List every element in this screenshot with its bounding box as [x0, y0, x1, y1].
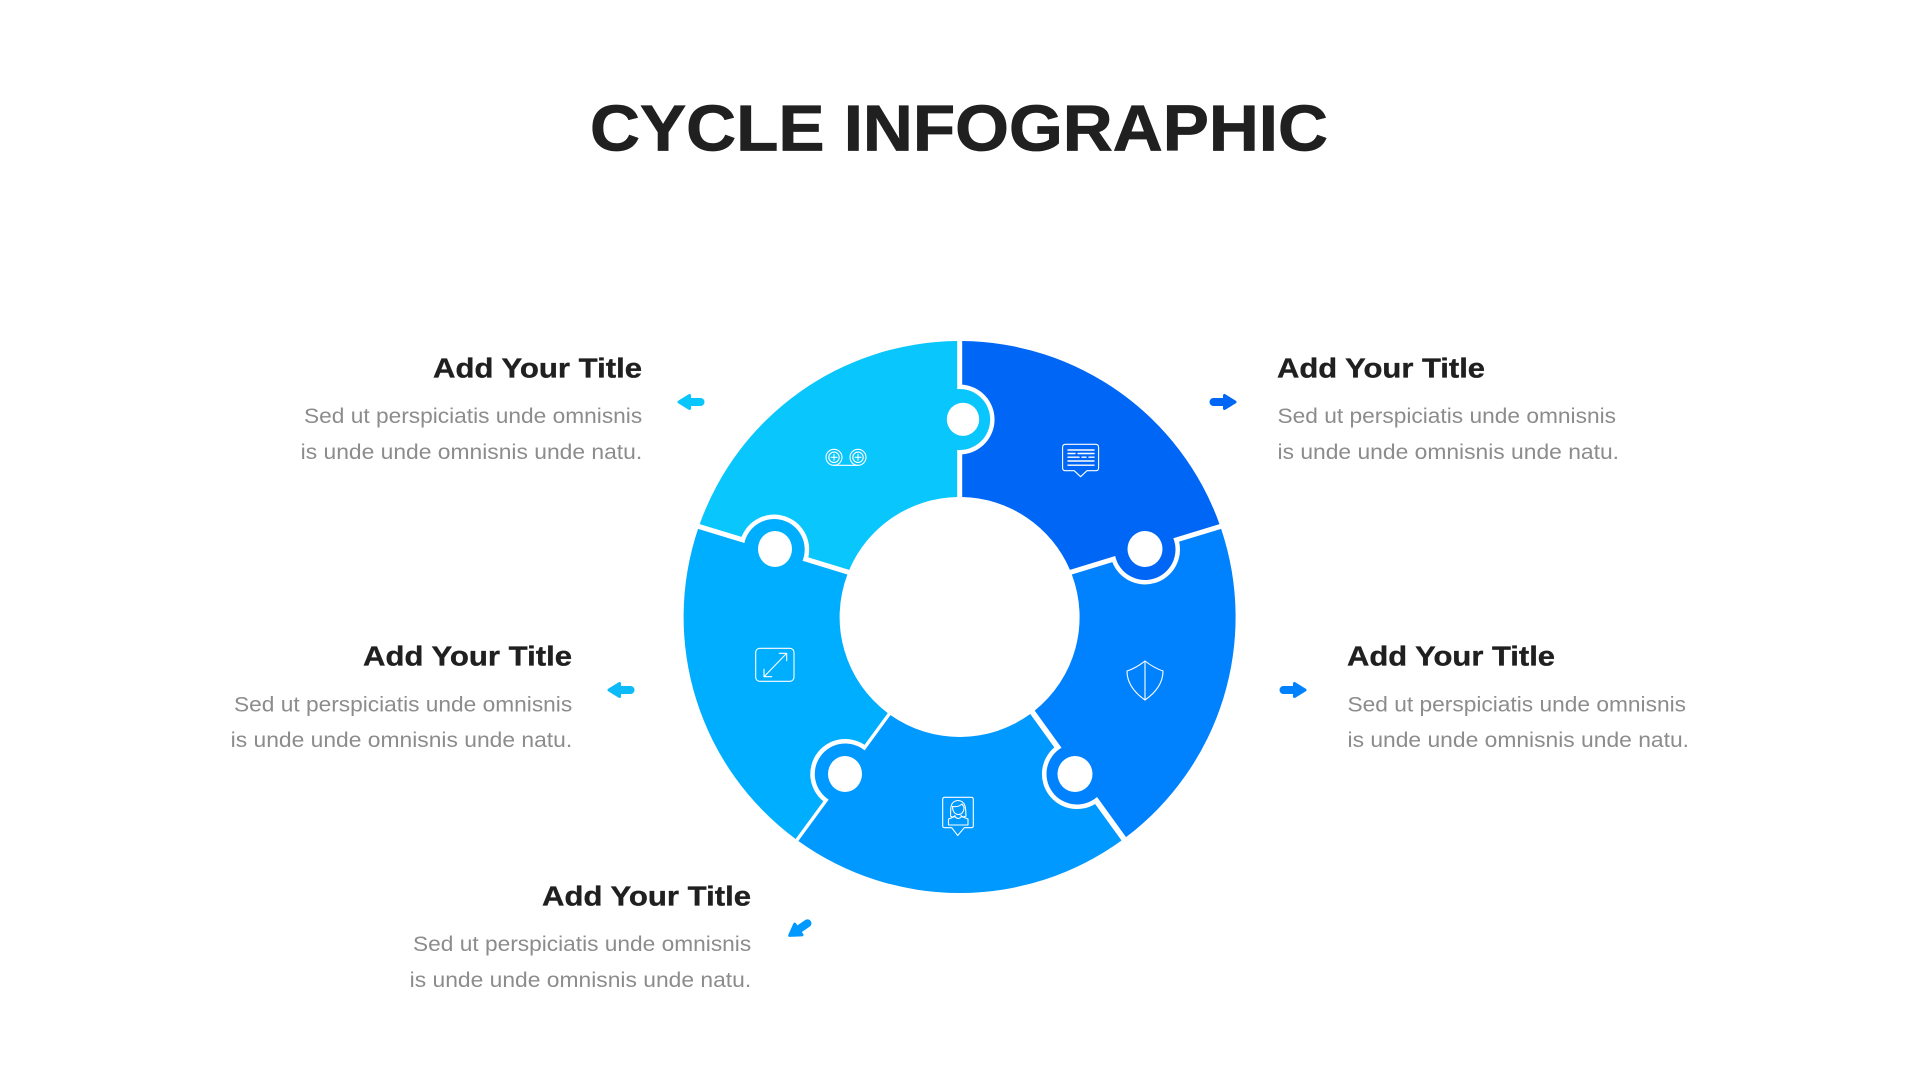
icon: person badge	[943, 797, 973, 836]
description: is unde unde omnisnis unde natu.	[1348, 728, 1689, 752]
description: is unde unde omnisnis unde natu.	[231, 728, 572, 752]
icon: expand arrows	[756, 648, 794, 681]
icon: message bubble	[1063, 444, 1099, 477]
title: CYCLE INFOGRAPHIC	[590, 92, 1328, 165]
icon: shield	[1127, 661, 1163, 700]
heading: Add Your Title	[1277, 353, 1485, 384]
segment 4: light blue, left	[684, 519, 888, 839]
description	[1348, 692, 1689, 752]
description	[301, 404, 642, 464]
tab holes	[758, 403, 1162, 792]
description: is unde unde omnisnis unde natu.	[1278, 440, 1619, 464]
icon: tape reels	[826, 449, 866, 465]
description: is unde unde omnisnis unde natu.	[301, 440, 642, 464]
description	[410, 932, 751, 992]
arrow: top right	[1211, 396, 1235, 408]
arrow: top left	[679, 396, 703, 408]
heading: Add Your Title	[1347, 641, 1555, 672]
text block: top right	[1277, 353, 1619, 464]
description: is unde unde omnisnis unde natu.	[410, 968, 751, 992]
heading: Add Your Title	[542, 880, 751, 912]
description: Sed ut perspiciatis unde omnisnis	[234, 692, 572, 716]
text block: middle left	[231, 641, 572, 752]
description: Sed ut perspiciatis unde omnisnis	[1278, 404, 1616, 428]
description: Sed ut perspiciatis unde omnisnis	[413, 932, 751, 956]
description: Sed ut perspiciatis unde omnisnis	[304, 404, 642, 428]
segment 3: mid blue, bottom	[798, 714, 1122, 893]
segment 5: cyan, top left	[700, 341, 990, 570]
heading: Add Your Title	[433, 353, 642, 384]
heading: Add Your Title	[363, 641, 572, 672]
segment 1: dark blue, top right	[962, 341, 1220, 580]
description: Sed ut perspiciatis unde omnisnis	[1348, 692, 1686, 716]
description	[231, 692, 572, 752]
text block: middle right	[1347, 641, 1689, 752]
description	[1278, 404, 1619, 464]
segment 2: blue, right	[1035, 529, 1236, 837]
arrow: middle left	[609, 684, 633, 696]
text block: top left	[301, 353, 642, 464]
text block: bottom left	[410, 880, 751, 992]
arrow: middle right	[1281, 684, 1305, 696]
arrow: bottom left	[786, 917, 813, 941]
cycle diagram	[684, 341, 1236, 893]
